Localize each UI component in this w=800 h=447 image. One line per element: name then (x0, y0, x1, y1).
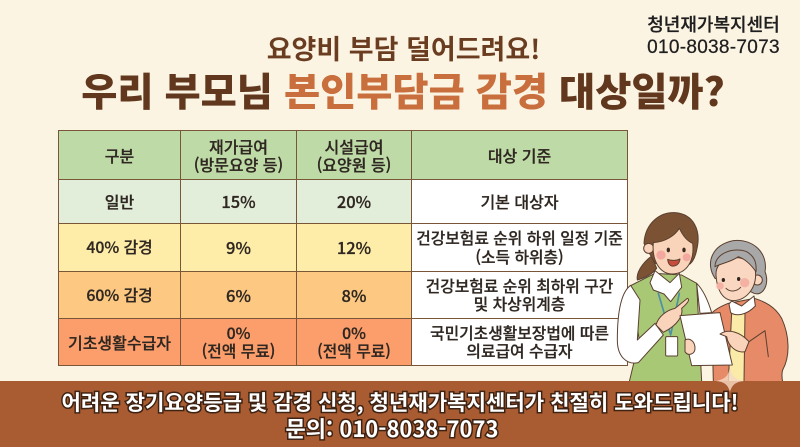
general criteria (411, 179, 628, 224)
row: general: 일반 (105, 189, 134, 213)
60% facility rate (296, 271, 412, 319)
40% facility rate: 12% (337, 235, 371, 259)
row: general (58, 179, 181, 224)
60% criteria: 및 차상위계층 (474, 292, 565, 315)
general home rate (180, 179, 297, 224)
40% criteria: (소득 하위층) (475, 244, 564, 268)
recipients home rate: 0% (227, 320, 250, 344)
recipients facility rate (296, 318, 412, 366)
senior figure (710, 240, 788, 382)
40% facility rate (296, 223, 412, 272)
60% facility rate: 8% (342, 283, 366, 307)
bottom banner (0, 381, 800, 447)
header: facility care: (요양원 등) (317, 152, 391, 176)
row: basic livelihood recipients: 기초생활수급자 (68, 330, 171, 354)
header: home care (180, 130, 297, 180)
header: facility care: 시설급여 (325, 134, 383, 158)
main title: 우리 부모님 본인부담금 감경 대상일까? (81, 61, 725, 118)
row: basic livelihood recipients (58, 318, 181, 366)
banner phone: 문의: 010-8038-7073 (286, 412, 498, 444)
contact: center name and phone: 청년재가복지센터 (647, 11, 780, 37)
header: home care: (방문요양 등) (194, 152, 283, 176)
recipients facility rate: 0% (342, 320, 366, 344)
contact: center name and phone: 010-8038-7073 (647, 37, 780, 58)
header: category: 구분 (105, 143, 134, 167)
40% criteria (411, 223, 628, 272)
recipients criteria: 의료급여 수급자 (466, 339, 573, 362)
banner message: 어려운 장기요양등급 및 감경 신청, 청년재가복지센터가 친절히 도와드립니다! (61, 387, 739, 417)
subtitle: 요양비 부담 덜어드려요! (267, 28, 540, 67)
header: criteria (411, 130, 628, 180)
60% criteria (411, 271, 628, 319)
general criteria: 기본 대상자 (480, 189, 559, 213)
60% home rate (180, 271, 297, 319)
contact: center name and phone (647, 11, 780, 58)
general facility rate (296, 179, 412, 224)
general facility rate: 20% (337, 189, 371, 213)
header: criteria: 대상 기준 (488, 143, 551, 167)
40% criteria: 건강보험료 순위 하위 일정 기준 (416, 226, 623, 249)
40% home rate: 9% (226, 235, 251, 259)
header: category (58, 130, 181, 180)
row: 60% reduction (58, 271, 181, 319)
illustration: caregiver and senior (616, 212, 789, 381)
general home rate: 15% (221, 189, 256, 213)
row: 60% reduction: 60% 감경 (86, 283, 153, 306)
table: copayment rates (58, 130, 628, 366)
icon: sparkle (716, 367, 744, 392)
document held by both (680, 313, 732, 366)
recipients criteria: 국민기초생활보장법에 따른 (430, 320, 609, 344)
hands on document (685, 331, 768, 357)
recipients home rate: (전액 무료) (202, 339, 275, 362)
row: 40% reduction: 40% 감경 (86, 235, 153, 258)
recipients home rate (180, 318, 297, 366)
60% criteria: 건강보험료 순위 최하위 구간 (426, 274, 613, 296)
recipients facility rate: (전액 무료) (317, 339, 391, 362)
recipients criteria (411, 318, 628, 366)
row: 40% reduction (58, 223, 181, 272)
caregiver figure (617, 213, 712, 382)
40% home rate (180, 223, 297, 272)
header: home care: 재가급여 (209, 134, 268, 158)
60% home rate: 6% (226, 283, 251, 307)
header: facility care (296, 130, 412, 180)
